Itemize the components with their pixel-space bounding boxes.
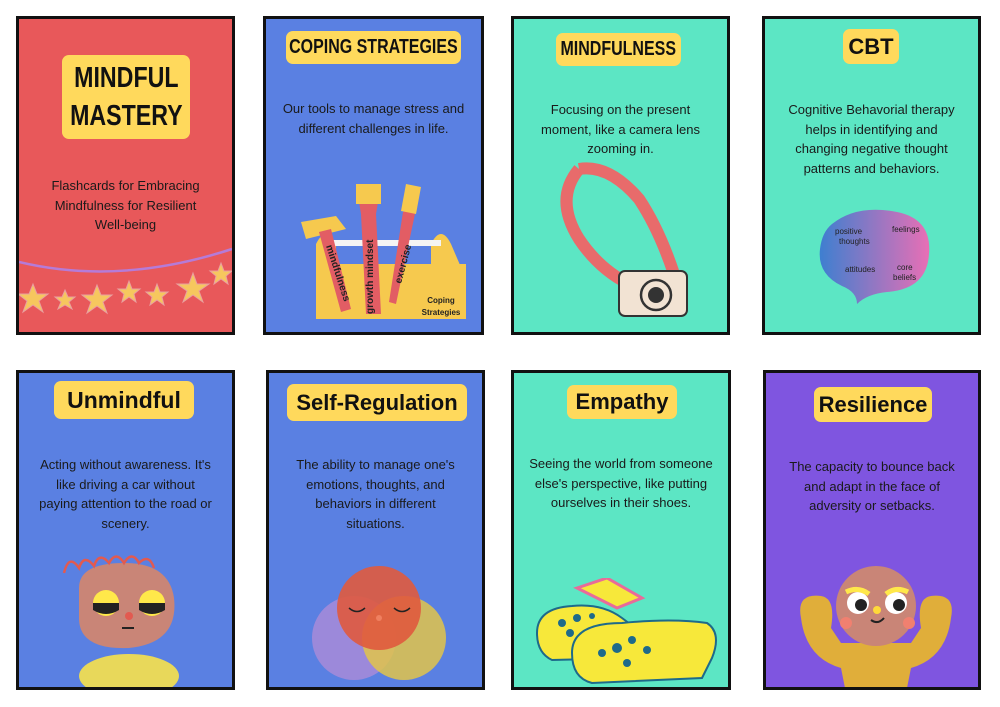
description text: moment, like a camera lens bbox=[541, 122, 700, 136]
icon: thought bubble: feelings bbox=[892, 225, 920, 234]
description text bbox=[39, 457, 212, 530]
icon: camera with strap bbox=[560, 162, 688, 317]
subtitle text bbox=[51, 178, 200, 232]
title label bbox=[567, 385, 677, 419]
title label bbox=[286, 31, 461, 64]
title label bbox=[54, 381, 194, 419]
description text bbox=[788, 102, 955, 176]
subtitle text: Mindfulness for Resilient bbox=[55, 198, 196, 212]
card: CBT bbox=[762, 16, 981, 335]
description text: adversity or setbacks. bbox=[809, 498, 935, 513]
icon: toolbox with tools: exercise bbox=[393, 243, 414, 285]
description text: The capacity to bounce back bbox=[789, 459, 955, 474]
icon: thought bubble: core bbox=[897, 263, 913, 272]
title label bbox=[287, 384, 467, 421]
icon: strong character bbox=[800, 566, 952, 687]
description text: zooming in. bbox=[587, 141, 654, 156]
title label: COPING STRATEGIES bbox=[289, 36, 458, 58]
title label: CBT bbox=[848, 34, 894, 59]
description text: helps in identifying and bbox=[805, 122, 938, 136]
description text: and adapt in the face of bbox=[804, 478, 940, 494]
title label: Self-Regulation bbox=[296, 390, 458, 415]
description text: Focusing on the present bbox=[551, 102, 690, 117]
title label: Empathy bbox=[576, 389, 668, 414]
description text: Our tools to manage stress and bbox=[283, 101, 464, 116]
title label bbox=[843, 29, 899, 64]
description text bbox=[789, 459, 955, 513]
icon: toolbox with tools: mindfulness bbox=[323, 244, 352, 303]
description text: changing negative thought bbox=[795, 141, 948, 156]
icon: thought bubble bbox=[820, 210, 930, 304]
title label bbox=[814, 387, 932, 422]
title label bbox=[62, 55, 190, 139]
description text: patterns and behaviors. bbox=[804, 160, 939, 176]
icon: star garland bbox=[19, 248, 232, 314]
card: Mindful Mastery bbox=[16, 16, 235, 335]
title label: Resilience bbox=[819, 392, 927, 417]
description text: behaviors in different bbox=[315, 496, 436, 511]
card: Resilience bbox=[763, 370, 981, 690]
subtitle text: Flashcards for Embracing bbox=[51, 178, 200, 193]
title label: MINDFULNESS bbox=[561, 38, 676, 60]
description text: different challenges in life. bbox=[298, 120, 449, 136]
description text: The ability to manage one's bbox=[296, 457, 455, 472]
icon: toolbox with tools: Strategies bbox=[422, 308, 461, 317]
description text bbox=[529, 456, 713, 510]
icon: yellow clogs bbox=[536, 578, 717, 684]
description text: Cognitive Behavorial therapy bbox=[788, 102, 955, 117]
description text: ourselves in their shoes. bbox=[551, 495, 691, 510]
icon: thought bubble: beliefs bbox=[893, 273, 916, 282]
icon: thought bubble: attitudes bbox=[845, 265, 875, 274]
card: Self-Regulation bbox=[266, 370, 485, 690]
card: Empathy bbox=[511, 370, 731, 690]
icon: overlapping circles face bbox=[312, 566, 446, 680]
description text bbox=[541, 102, 700, 156]
description text: like driving a car without bbox=[56, 476, 195, 492]
card: Mindfulness bbox=[511, 16, 730, 335]
icon: thought bubble: positive bbox=[835, 227, 863, 236]
description text: emotions, thoughts, and bbox=[306, 476, 445, 492]
description text: Seeing the world from someone bbox=[529, 456, 713, 471]
description text: paying attention to the road or bbox=[39, 496, 212, 511]
description text: else's perspective, like putting bbox=[535, 476, 707, 490]
description text: situations. bbox=[346, 516, 405, 530]
description text: scenery. bbox=[101, 516, 150, 530]
icon: sleepy face character bbox=[62, 555, 179, 687]
icon: toolbox with tools: Coping bbox=[427, 296, 455, 305]
description text bbox=[283, 101, 464, 136]
title label bbox=[556, 33, 681, 66]
description text bbox=[296, 457, 455, 530]
title label: MASTERY bbox=[70, 100, 182, 132]
icon: toolbox with tools bbox=[301, 184, 466, 319]
title label: MINDFUL bbox=[74, 62, 178, 94]
description text: Acting without awareness. It's bbox=[40, 457, 211, 472]
title label: Unmindful bbox=[67, 387, 181, 413]
subtitle text: Well-being bbox=[95, 217, 156, 232]
card: Coping Strategies bbox=[263, 16, 484, 335]
card: Unmindful bbox=[16, 370, 235, 690]
icon: thought bubble: thoughts bbox=[839, 237, 870, 246]
icon: toolbox with tools: growth mindset bbox=[365, 239, 376, 314]
